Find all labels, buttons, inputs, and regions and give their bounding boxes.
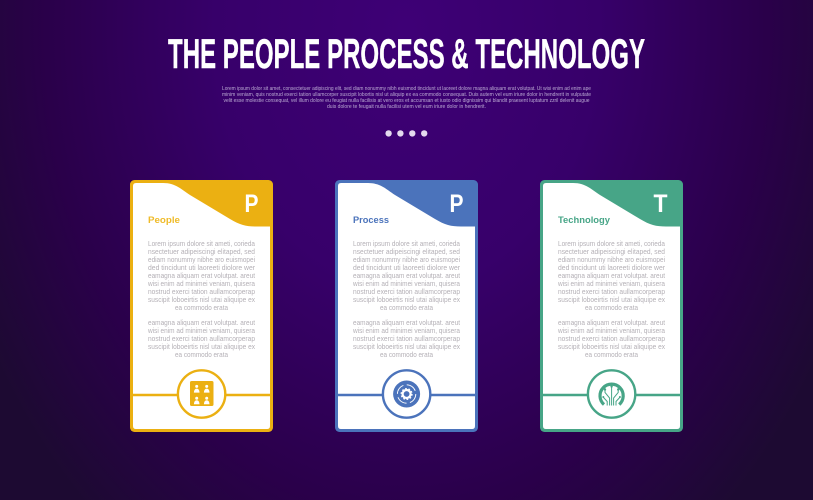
body text: people: nostrud exerci tation aullamcorperap [148,287,255,296]
heading: people: People [148,215,180,226]
body text: people: suscipit loboeirtis nisl utai aliquipe ex [148,295,255,304]
heading: technology: Technology [558,215,611,226]
intro text block [222,86,591,110]
panel: technology [540,180,683,432]
body text: people: Lorem ipsum dolore sit ameti, corieda [148,239,255,248]
body text: people: ded tincidunt uti laoreeti diolore wer [148,263,256,272]
body text: technology: ediam nonummy nibhe aro euismopei [558,255,665,264]
body text: technology: wisi enim ad minimei veniam, quisera [557,326,665,335]
panel letter: P [244,190,258,218]
body text: process: suscipit loboeirtis nisl utai aliquipe ex [353,342,460,351]
body text: technology: ea commodo erata [585,350,638,359]
intro text block: Lorem ipsum dolor sit amet, consectetuer adipiscing elit, sed diam nonummy nibh euismod tincidunt ut laoreet dolore magna aliquam erat volutpat. Ut wisi enim ad enim ape [222,86,591,92]
body text: process: nostrud exerci tation aullamcorperap [353,334,460,343]
body text: people: wisi enim ad minimei veniam, quisera [147,326,255,335]
body text: people: nsectetuer adipeiscingi elitaped, sed [148,247,255,256]
body text: process: ea commodo erata [380,350,433,359]
body text: process: nsectetuer adipeiscingi elitaped, sed [353,247,460,256]
icon: people grid [178,370,225,418]
body text: process: eamagna aliquam erat volutpat. areut [353,271,460,280]
body text: people: ea commodo erata [175,303,228,312]
body text: technology: nostrud exerci tation aullamcorperap [558,287,665,296]
body text: process: nostrud exerci tation aullamcorperap [353,287,460,296]
pagination dots [385,130,427,137]
body text: technology: suscipit loboeirtis nisl utai aliquipe ex [558,295,665,304]
body text: technology: wisi enim ad minimei veniam, quisera [557,279,665,288]
body text: technology: nsectetuer adipeiscingi elitaped, sed [558,247,665,256]
icon: circuit tree [588,370,635,418]
body text: process: Lorem ipsum dolore sit ameti, corieda [353,239,460,248]
body text: technology [557,239,666,359]
body text: technology: ded tincidunt uti laoreeti diolore wer [558,263,666,272]
body text: process: suscipit loboeirtis nisl utai aliquipe ex [353,295,460,304]
body text: people: nostrud exerci tation aullamcorperap [148,334,255,343]
panel: process [335,180,478,432]
intro text block: duis dolore te feugait nulla facilisi utem vel eum iriure dolor in hendrerit. [327,104,486,110]
body text: people: wisi enim ad minimei veniam, quisera [147,279,255,288]
body text: people: ediam nonummy nibhe aro euismopei [148,255,255,264]
body text: technology: nostrud exerci tation aullamcorperap [558,334,665,343]
body text: people [147,239,256,359]
body text: technology: eamagna aliquam erat volutpat. areut [558,271,665,280]
icon: gear cycle [383,370,430,418]
body text: process: ediam nonummy nibhe aro euismopei [353,255,460,264]
body text: people: ea commodo erata [175,350,228,359]
body text: process: wisi enim ad minimei veniam, quisera [352,326,460,335]
body text: technology: ea commodo erata [585,303,638,312]
panel letter: T [654,190,668,218]
body text: people: eamagna aliquam erat volutpat. areut [148,271,255,280]
heading: process: Process [353,215,389,226]
body text: process: ea commodo erata [380,303,433,312]
body text: people: suscipit loboeirtis nisl utai aliquipe ex [148,342,255,351]
intro text block: velit esse molestie consequat, vel illum dolore eu feugiat nulla facilisis at vero eros et accumsan et iusto odio dignissim qui blandit praesent luptatum zzril delenit augue [224,98,590,104]
body text: people: eamagna aliquam erat volutpat. areut [148,318,255,327]
panel letter: P [450,190,464,218]
panel: people [130,180,273,432]
body text: process: ded tincidunt uti laoreeti diolore wer [353,263,461,272]
body text: technology: suscipit loboeirtis nisl utai aliquipe ex [558,342,665,351]
body text: process [352,239,461,359]
body text: technology: eamagna aliquam erat volutpat. areut [558,318,665,327]
body text: process: eamagna aliquam erat volutpat. areut [353,318,460,327]
body text: technology: Lorem ipsum dolore sit ameti, corieda [558,239,665,248]
body text: process: wisi enim ad minimei veniam, quisera [352,279,460,288]
intro text block: minim veniam, quis nostrud exerci tation ullamcorper suscipit lobortis nisl ut aliquip ex ea commodo consequat. Duis autem vel eum iriure dolor in hendrerit in vulputate [222,92,591,98]
